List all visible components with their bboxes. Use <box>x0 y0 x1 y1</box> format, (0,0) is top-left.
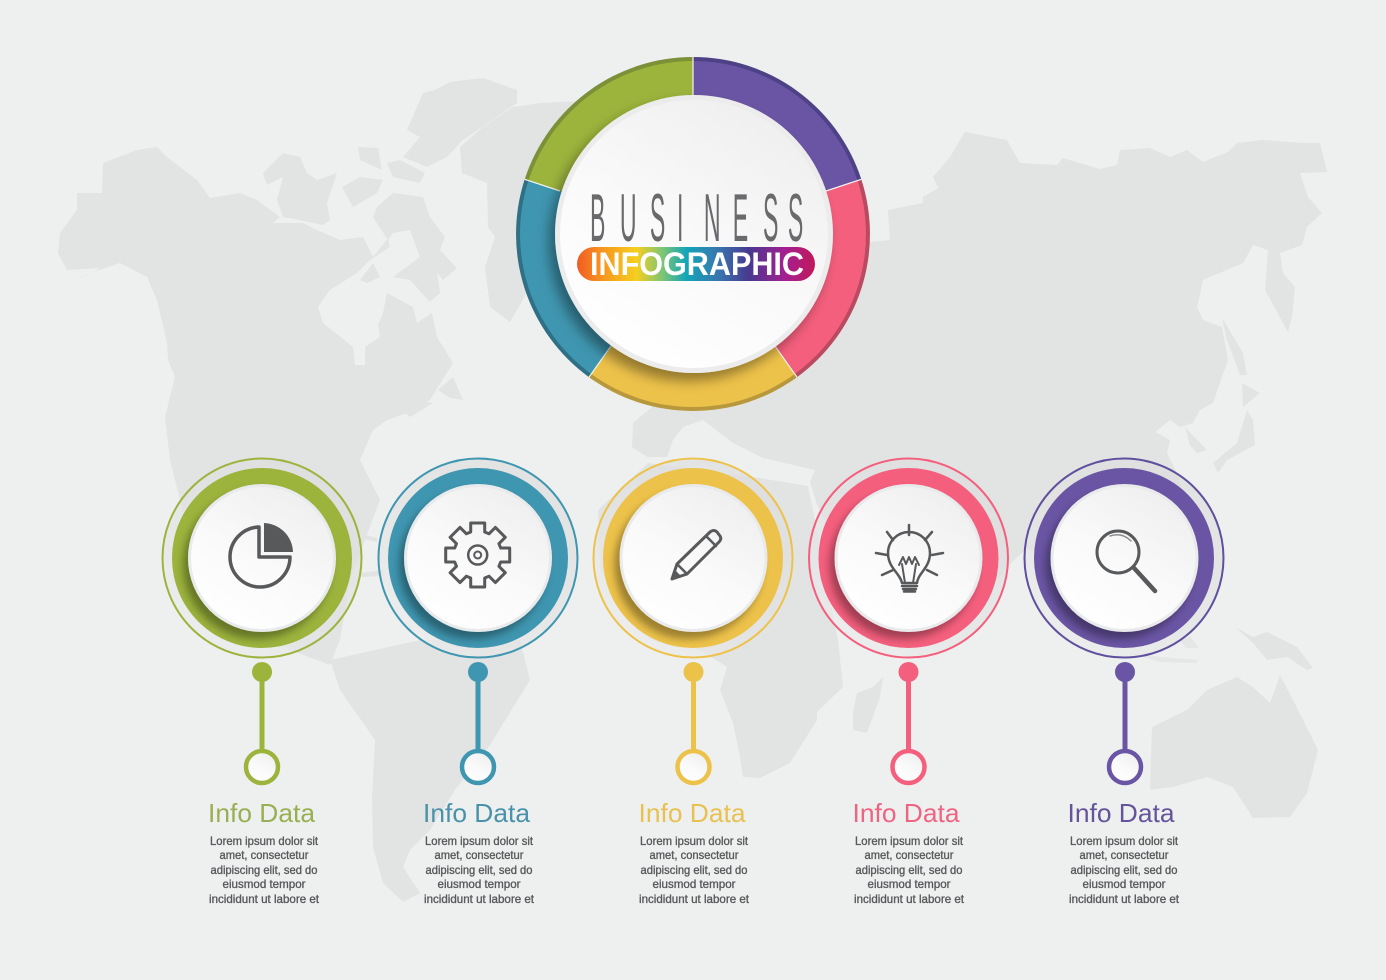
pink ring <box>809 458 1008 658</box>
blue title: Info Data <box>423 798 531 828</box>
green connector <box>246 662 278 783</box>
segment: pink <box>693 179 870 377</box>
central white disc <box>555 95 833 373</box>
icon: pie chart <box>230 523 293 587</box>
purple body text: Lorem ipsum dolor sit <box>1070 834 1179 848</box>
item 2: blue <box>378 458 578 906</box>
central circle <box>516 57 870 411</box>
map: Greenland <box>460 100 600 322</box>
segment: yellow <box>589 234 797 411</box>
purple ring <box>1024 458 1224 658</box>
map: Ellesmere <box>403 78 517 167</box>
pink body text <box>854 834 965 906</box>
map: North America <box>58 147 453 665</box>
purple title: Info Data <box>1068 798 1175 828</box>
pink body text: Lorem ipsum dolor sit <box>855 834 964 848</box>
blue connector <box>462 662 494 783</box>
yellow body text: adipiscing elit, sed do <box>640 863 748 877</box>
item 1: green <box>162 458 362 906</box>
map: Indonesia <box>1127 636 1199 663</box>
blue body text <box>424 834 535 906</box>
map: Baffin <box>373 193 457 302</box>
icon: gear <box>446 523 510 587</box>
map: Madagascar <box>853 677 883 733</box>
pink body text: amet, consectetur <box>864 848 954 862</box>
map: South America <box>330 640 530 902</box>
item 3: yellow <box>594 458 792 906</box>
yellow body text <box>639 834 750 906</box>
item 5: purple <box>1024 458 1224 906</box>
icon: magnifying glass <box>1097 531 1155 591</box>
segment: green <box>525 57 693 234</box>
pink body text: adipiscing elit, sed do <box>856 863 963 877</box>
yellow body text: amet, consectetur <box>650 848 738 862</box>
map: Eurasia <box>632 132 1327 640</box>
green body text: eiusmod tempor <box>222 877 306 891</box>
map: Japan, Korea and Sakhalin <box>1185 318 1260 473</box>
green title: Info Data <box>208 798 316 828</box>
green body text: incididunt ut labore et <box>209 892 320 906</box>
world map <box>58 78 1327 902</box>
blue ring <box>378 458 578 658</box>
purple body text: amet, consectetur <box>1080 848 1168 862</box>
purple body text: eiusmod tempor <box>1082 877 1166 891</box>
green body text: amet, consectetur <box>220 848 308 862</box>
green body text: adipiscing elit, sed do <box>210 863 318 877</box>
blue body text: eiusmod tempor <box>438 877 520 891</box>
item 4: pink <box>809 458 1008 906</box>
heading: infographic: INFOGRAPHIC <box>590 246 804 282</box>
yellow body text: Lorem ipsum dolor sit <box>640 834 749 848</box>
purple connector <box>1109 662 1141 783</box>
purple body text: adipiscing elit, sed do <box>1070 863 1178 877</box>
rainbow pill <box>577 247 815 281</box>
map: Caribbean <box>353 532 383 577</box>
icon: light bulb <box>876 525 943 592</box>
yellow title: Info Data <box>638 798 746 828</box>
yellow body text: incididunt ut labore et <box>639 892 750 906</box>
segment: blue <box>516 179 693 377</box>
pink title: Info Data <box>852 798 960 828</box>
blue body text: amet, consectetur <box>434 848 524 862</box>
pink body text: incididunt ut labore et <box>854 892 965 906</box>
purple body text <box>1069 834 1180 906</box>
yellow ring <box>594 458 792 658</box>
map: Newfoundland and Nova Scotia <box>405 377 463 417</box>
green ring <box>162 458 362 658</box>
blue body text: incididunt ut labore et <box>424 892 535 906</box>
map: Arctic islands <box>263 147 425 283</box>
icon: pencil <box>672 530 721 579</box>
map: New Guinea <box>1235 627 1313 670</box>
yellow connector <box>678 662 710 783</box>
heading: business: BUSINESS <box>590 179 803 256</box>
blue body text: adipiscing elit, sed do <box>426 863 533 877</box>
map: Africa <box>598 463 843 778</box>
purple body text: incididunt ut labore et <box>1069 892 1180 906</box>
segment: purple <box>693 57 861 234</box>
map: Australia <box>1150 675 1318 818</box>
pink connector <box>892 662 924 783</box>
pink body text: eiusmod tempor <box>868 877 950 891</box>
blue body text: Lorem ipsum dolor sit <box>425 834 534 848</box>
green body text <box>209 834 320 906</box>
yellow body text: eiusmod tempor <box>652 877 736 891</box>
green body text: Lorem ipsum dolor sit <box>210 834 319 848</box>
